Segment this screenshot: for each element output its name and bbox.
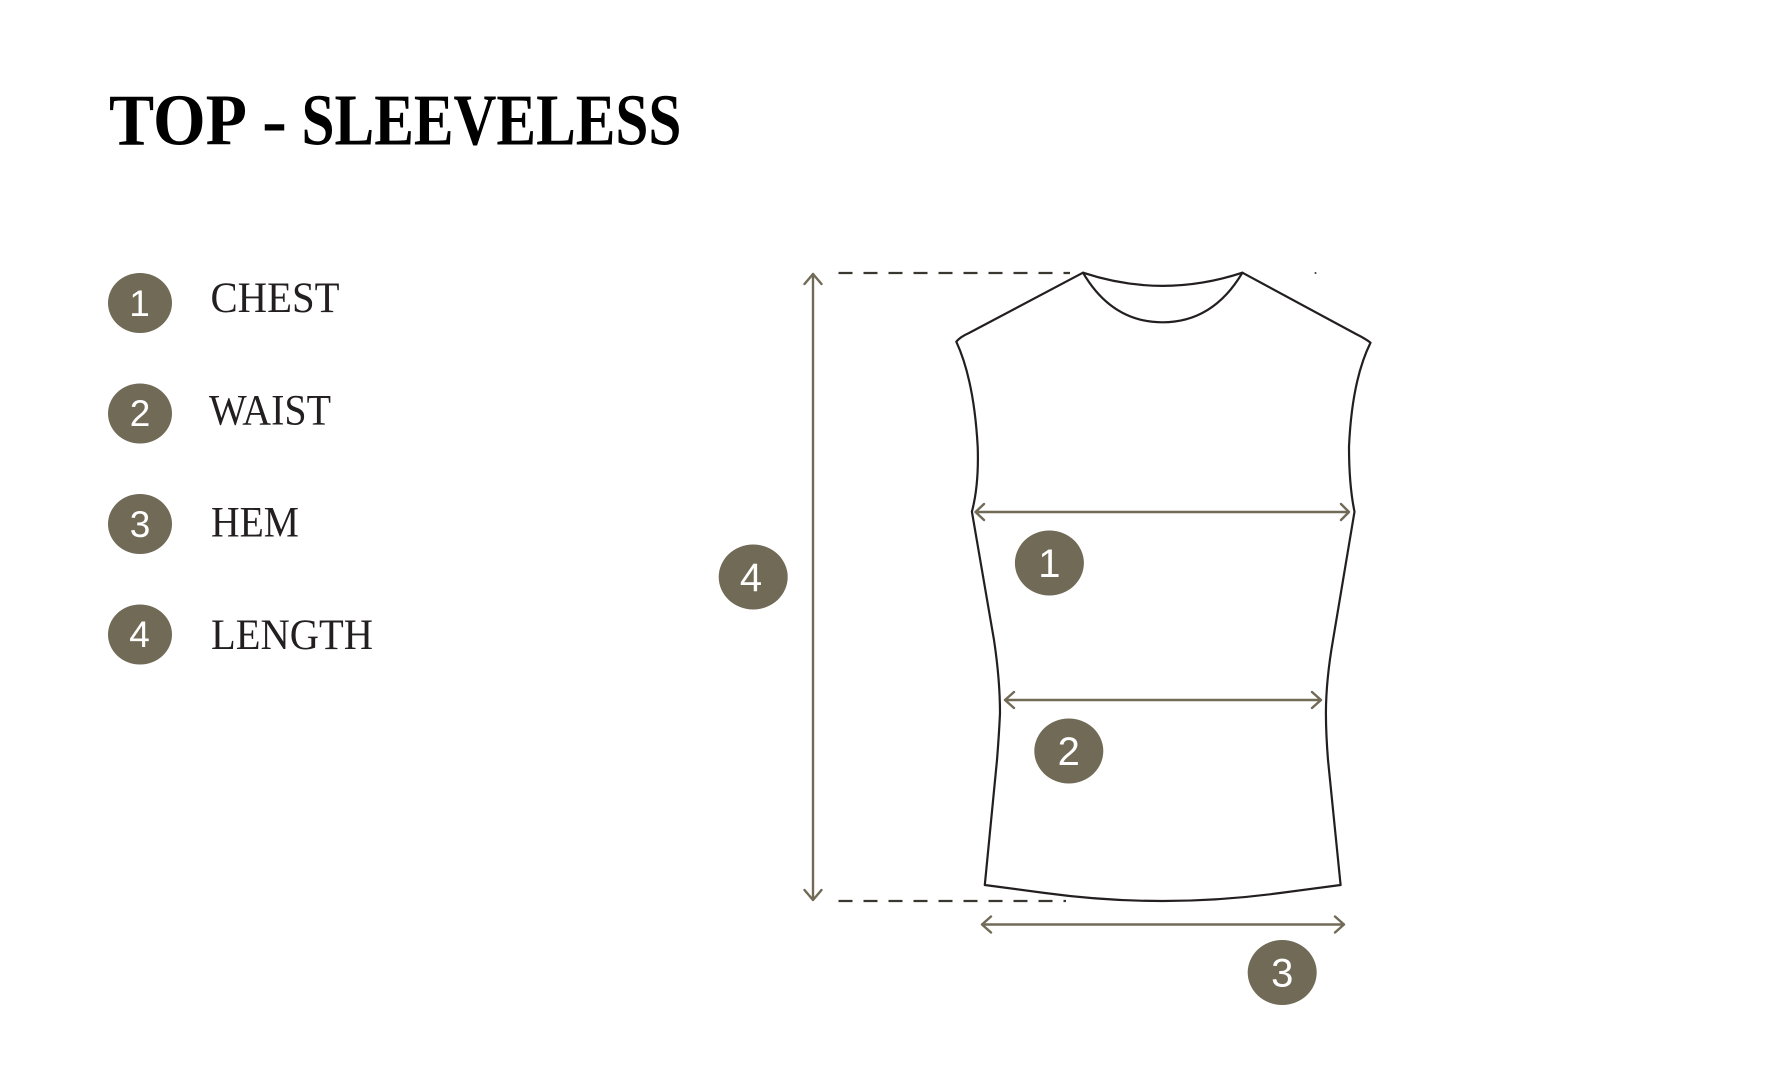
- legend item: chest: [108, 273, 340, 333]
- legend item: waist: 2: [130, 393, 150, 434]
- marker 2: [1034, 718, 1103, 784]
- marker 3: 3: [1271, 952, 1293, 996]
- marker 1: [1015, 530, 1084, 596]
- marker 3: [1248, 940, 1317, 1005]
- legend item: length: [108, 604, 373, 664]
- marker 2: 2: [1058, 730, 1080, 774]
- legend item: chest: 1: [129, 283, 150, 324]
- marker 1: 1: [1038, 542, 1061, 586]
- speck: [1314, 272, 1316, 274]
- legend: [108, 273, 373, 664]
- marker 4: [719, 544, 788, 610]
- legend item: length: LENGTH: [211, 612, 373, 659]
- legend item: hem: 3: [130, 504, 150, 545]
- dashed guide: top: [838, 272, 1070, 274]
- title: -: [262, 80, 287, 160]
- arrow: chest: [976, 504, 1349, 520]
- legend item: hem: HEM: [211, 500, 299, 546]
- marker 4: 4: [740, 556, 762, 600]
- legend item: chest: CHEST: [210, 275, 340, 322]
- legend item: waist: WAIST: [209, 388, 331, 434]
- arrow: length: [804, 274, 822, 900]
- title: [109, 80, 682, 160]
- title: TOP: [109, 80, 247, 160]
- dashed guide: bottom: [838, 900, 1066, 902]
- garment outline: sleeveless top: [956, 273, 1370, 901]
- legend item: length: 4: [129, 614, 150, 655]
- title: SLEEVELESS: [302, 80, 682, 160]
- arrow: waist: [1005, 692, 1321, 708]
- legend item: hem: [108, 494, 299, 554]
- legend item: waist: [108, 384, 331, 444]
- neckline: [1083, 273, 1242, 322]
- arrow: hem: [982, 916, 1344, 932]
